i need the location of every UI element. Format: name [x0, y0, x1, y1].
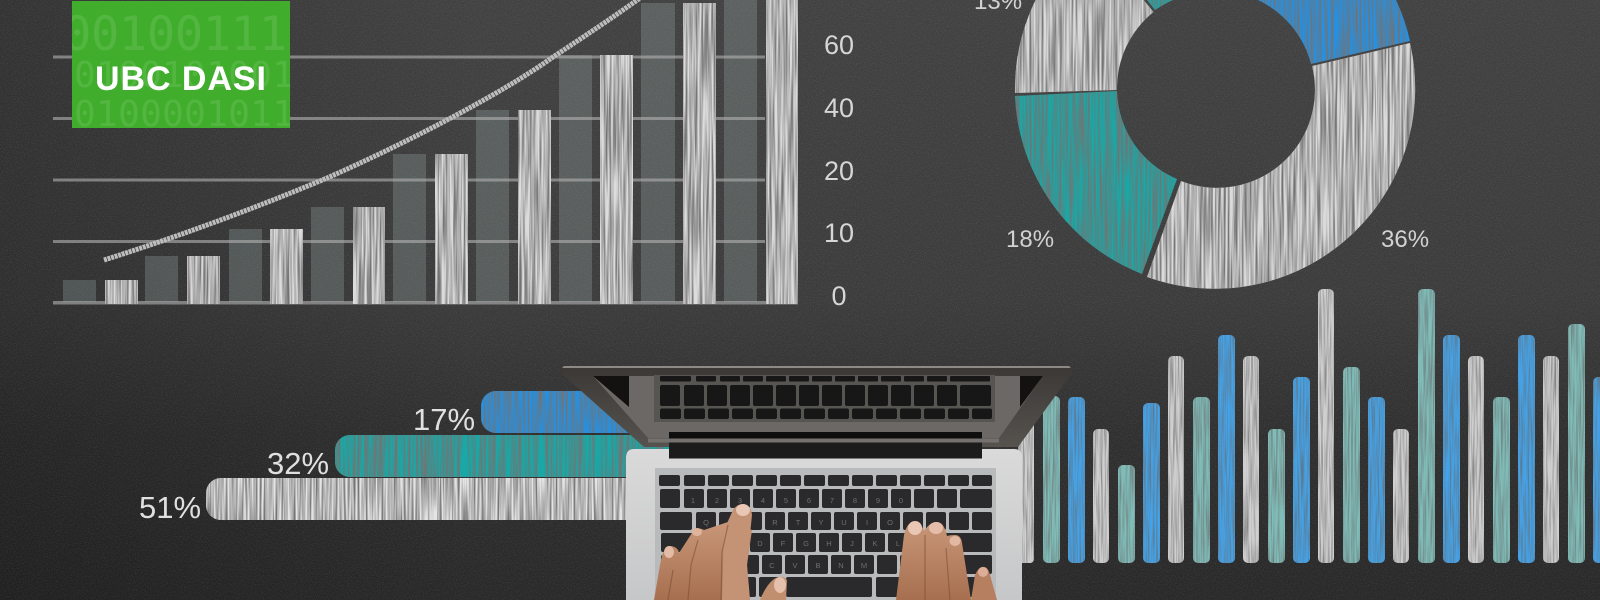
- axis labels: [824, 30, 854, 311]
- key legends: K: [872, 539, 878, 548]
- key legends: U: [841, 518, 847, 527]
- bar: 32%: [335, 435, 680, 477]
- key legends: G: [803, 539, 809, 548]
- key legends: F: [781, 539, 786, 548]
- key legends: 3: [738, 496, 742, 505]
- logo wordmark: UBC DASI: [95, 60, 266, 98]
- key legends: 4: [761, 496, 765, 505]
- key legends: T: [796, 518, 801, 527]
- axis labels: 20: [824, 156, 854, 186]
- segment: teal 18%: [1015, 91, 1177, 274]
- segment: blue: [1258, 0, 1410, 64]
- key legends: Q: [703, 518, 709, 527]
- hinge: [648, 432, 999, 458]
- key legends: V: [792, 561, 798, 570]
- donut percent labels: [974, 0, 1429, 253]
- binary pattern: [72, 14, 290, 126]
- trend line: [104, 0, 640, 260]
- logo badge: UBC DASI: [72, 1, 290, 128]
- horizontal percent bars: 17%: [413, 402, 475, 437]
- chalk bars: [105, 0, 798, 304]
- laptop base: [626, 449, 1022, 600]
- key legends: 6: [807, 496, 811, 505]
- bar: 51%: [206, 478, 676, 520]
- binary pattern: 0100001011: [74, 94, 294, 135]
- segment: large grey 36%: [1147, 43, 1415, 289]
- axis labels: 60: [824, 30, 854, 60]
- key legends: H: [826, 539, 832, 548]
- shadow bars: [63, 0, 757, 302]
- key legends: J: [850, 539, 854, 548]
- right hand: [896, 521, 997, 600]
- key legends: [691, 496, 903, 570]
- laptop: [560, 366, 1073, 600]
- key legends: B: [815, 561, 821, 570]
- key legends: C: [769, 561, 775, 570]
- donut chart: [1015, 0, 1415, 289]
- key legends: 5: [784, 496, 788, 505]
- key legends: O: [887, 518, 893, 527]
- key legends: N: [838, 561, 844, 570]
- key legends: D: [757, 539, 763, 548]
- axis labels: 10: [824, 218, 854, 248]
- segment: grey 13%: [1015, 0, 1154, 93]
- key legends: R: [772, 518, 778, 527]
- axis labels: 0: [831, 281, 847, 311]
- key legends: 9: [876, 496, 880, 505]
- axis labels: 40: [824, 93, 854, 123]
- left hand: [654, 504, 752, 600]
- key legends: Y: [818, 518, 824, 527]
- donut percent labels: 18%: [1006, 226, 1054, 253]
- segment: small teal: [1147, 0, 1173, 10]
- keyboard well: [655, 468, 996, 600]
- left thumb: [760, 577, 787, 600]
- key legends: 1: [691, 496, 695, 505]
- horizontal percent bars: [139, 391, 681, 525]
- binary pattern: 0100101001: [74, 55, 294, 96]
- key legends: 2: [715, 496, 719, 505]
- horizontal percent bars: 32%: [267, 446, 329, 481]
- donut percent labels: 36%: [1381, 226, 1429, 253]
- key legends: I: [866, 518, 868, 527]
- hands typing: [654, 504, 997, 600]
- key legends: 7: [830, 496, 834, 505]
- key legends: L: [896, 539, 900, 548]
- horizontal percent bars: 51%: [139, 490, 201, 525]
- key legends: 0: [899, 496, 903, 505]
- keyboard keys: [659, 475, 992, 597]
- binary pattern: 00100111: [63, 7, 287, 62]
- vertical chalk bars: [1018, 289, 1600, 563]
- bar chart with trend line: [53, 0, 798, 304]
- bar: 17%: [481, 391, 681, 433]
- reflected keyboard: [660, 376, 992, 419]
- key legends: 8: [853, 496, 857, 505]
- key legends: M: [861, 561, 867, 570]
- laptop lid: [560, 366, 1073, 447]
